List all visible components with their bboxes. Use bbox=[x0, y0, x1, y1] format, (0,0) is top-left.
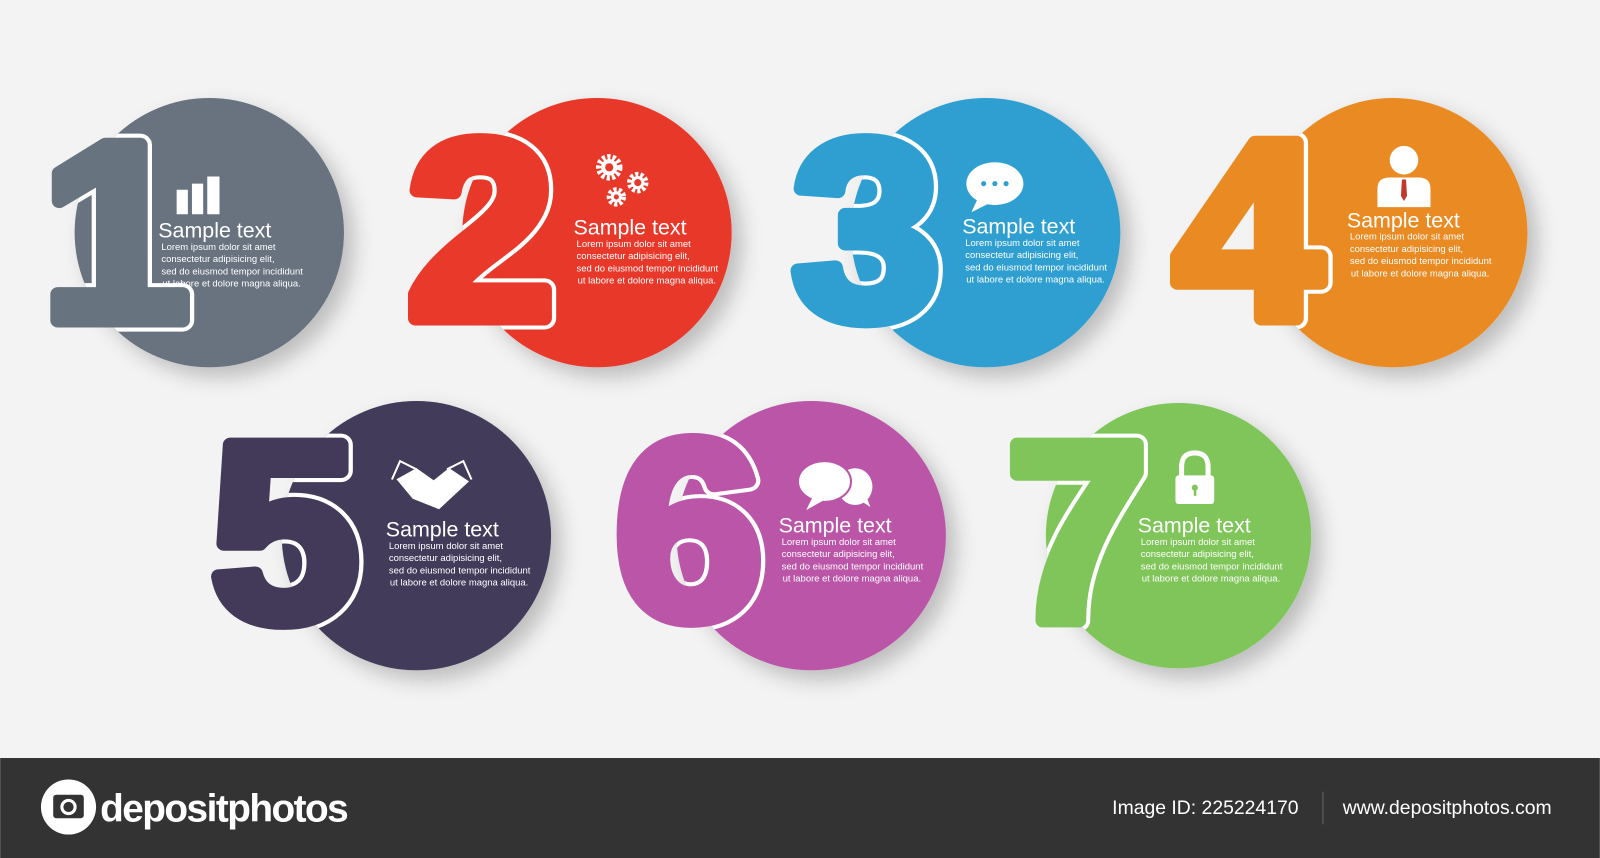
text block 3: sed do eiusmod tempor incididunt bbox=[965, 262, 1107, 273]
text block 1: ut labore et dolore magna aliqua. bbox=[162, 279, 301, 290]
text block 4: ut labore et dolore magna aliqua. bbox=[1351, 268, 1489, 279]
text block 5: Sample text bbox=[386, 518, 499, 542]
text block 4: consectetur adipisicing elit, bbox=[1350, 244, 1463, 255]
number 3 bbox=[790, 133, 943, 330]
text block 6: Lorem ipsum dolor sit amet bbox=[782, 537, 896, 548]
text block 2: Sample text bbox=[574, 216, 687, 240]
text block 6: ut labore et dolore magna aliqua. bbox=[783, 574, 921, 585]
card 1 bbox=[41, 90, 344, 375]
text block 7: sed do eiusmod tempor incididunt bbox=[1141, 561, 1283, 572]
logo: depositphotos bbox=[100, 787, 347, 830]
text block 2: consectetur adipisicing elit, bbox=[577, 251, 690, 262]
number 5: 5 bbox=[210, 390, 359, 675]
number 7: 7 bbox=[1006, 390, 1148, 675]
card 3 bbox=[792, 88, 1120, 373]
icon: handshake bbox=[392, 461, 471, 508]
text block 2: Lorem ipsum dolor sit amet bbox=[577, 239, 691, 250]
image id: Image ID: 225224170 bbox=[1112, 797, 1299, 819]
text block 3 bbox=[962, 215, 1107, 286]
text block 4: sed do eiusmod tempor incididunt bbox=[1350, 256, 1492, 267]
icon: speech bubble bbox=[966, 162, 1023, 212]
number 7 bbox=[1010, 434, 1148, 630]
text block 4: Lorem ipsum dolor sit amet bbox=[1350, 232, 1464, 243]
number 1: 1 bbox=[41, 90, 190, 375]
number 3: 3 bbox=[792, 88, 941, 373]
text block 2: sed do eiusmod tempor incididunt bbox=[577, 263, 719, 274]
text block 5: ut labore et dolore magna aliqua. bbox=[390, 578, 528, 589]
card 6 bbox=[614, 388, 946, 673]
text block 5: sed do eiusmod tempor incididunt bbox=[389, 565, 531, 576]
text block 7 bbox=[1138, 514, 1283, 585]
card 2 bbox=[406, 88, 732, 373]
text block 6: sed do eiusmod tempor incididunt bbox=[782, 561, 924, 572]
footer bar bbox=[0, 758, 1600, 858]
text block 5: consectetur adipisicing elit, bbox=[389, 553, 502, 564]
number 6 bbox=[616, 433, 766, 630]
card 7 bbox=[1006, 390, 1311, 675]
card 5 bbox=[210, 390, 551, 675]
text block 3: ut labore et dolore magna aliqua. bbox=[966, 275, 1105, 286]
text block 3: consectetur adipisicing elit, bbox=[965, 250, 1078, 261]
number 7: 7 bbox=[1006, 390, 1148, 675]
text block 1 bbox=[158, 219, 303, 290]
text block 6 bbox=[779, 514, 924, 585]
text block 6: Sample text bbox=[779, 514, 892, 538]
text block 5 bbox=[386, 518, 531, 589]
text block 7: ut labore et dolore magna aliqua. bbox=[1142, 574, 1280, 585]
number 2 bbox=[408, 132, 556, 330]
number 5: 5 bbox=[210, 390, 359, 675]
number 4 bbox=[1170, 133, 1333, 330]
number 4: 4 bbox=[1173, 88, 1324, 373]
number 1 bbox=[50, 134, 194, 332]
icon: person bbox=[1377, 146, 1430, 207]
text block 4 bbox=[1347, 209, 1492, 279]
text block 6: consectetur adipisicing elit, bbox=[782, 549, 895, 560]
text block 2 bbox=[574, 216, 719, 287]
number 4: 4 bbox=[1173, 88, 1324, 373]
card 4 bbox=[1173, 88, 1527, 373]
text block 2: ut labore et dolore magna aliqua. bbox=[578, 276, 716, 287]
number 6: 6 bbox=[614, 388, 763, 673]
icon: two bubbles bbox=[798, 461, 872, 510]
icon: gears bbox=[599, 157, 646, 204]
icon: lock bbox=[1175, 453, 1214, 504]
text block 5: Lorem ipsum dolor sit amet bbox=[389, 541, 503, 552]
text block 1: sed do eiusmod tempor incididunt bbox=[161, 266, 303, 277]
number 5 bbox=[211, 434, 364, 630]
text block 7: Lorem ipsum dolor sit amet bbox=[1141, 537, 1255, 548]
logo bbox=[41, 779, 347, 835]
number 6: 6 bbox=[614, 388, 763, 673]
url: www.depositphotos.com bbox=[1342, 797, 1552, 819]
number 1: 1 bbox=[41, 90, 190, 375]
text block 1: Lorem ipsum dolor sit amet bbox=[161, 242, 276, 253]
text block 1: Sample text bbox=[158, 219, 271, 243]
text block 3: Lorem ipsum dolor sit amet bbox=[965, 238, 1080, 249]
text block 7: Sample text bbox=[1138, 514, 1251, 538]
text block 7: consectetur adipisicing elit, bbox=[1141, 549, 1254, 560]
text block 1: consectetur adipisicing elit, bbox=[161, 254, 275, 265]
text block 3: Sample text bbox=[962, 215, 1075, 239]
icon: bar chart bbox=[177, 176, 219, 214]
text block 4: Sample text bbox=[1347, 209, 1460, 233]
number 2: 2 bbox=[406, 88, 555, 373]
number 3: 3 bbox=[792, 88, 941, 373]
number 2: 2 bbox=[406, 88, 555, 373]
